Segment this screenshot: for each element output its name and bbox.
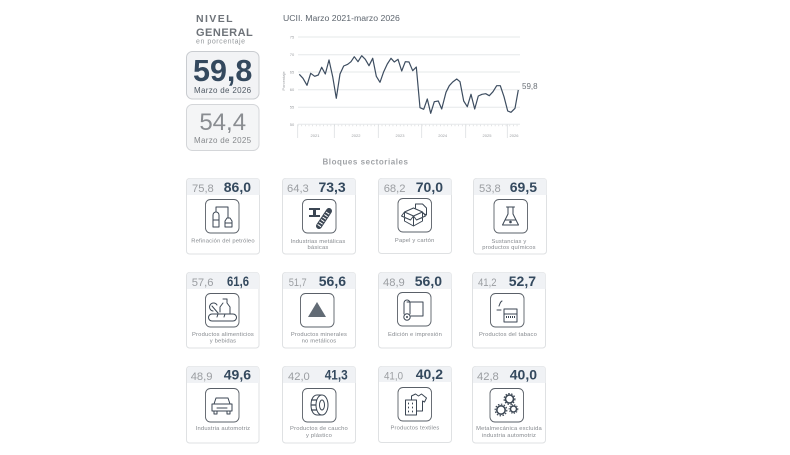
line chart: 2021	[311, 133, 320, 138]
icon: paper roll	[404, 300, 423, 320]
card: productos textiles	[378, 366, 452, 442]
card: edición e impresión: 56,0	[415, 273, 442, 289]
card: productos del tabaco: 52,7	[509, 273, 536, 289]
card: sustancias y productos químicos	[474, 178, 546, 254]
card: productos minerales no metálicos	[282, 272, 356, 348]
icon: garment and fabric	[406, 394, 426, 415]
line chart: 2026	[510, 133, 519, 138]
card: metalmecánica excluida industria automotriz: industria automotriz	[482, 433, 536, 439]
section heading: Bloques sectoriales	[322, 158, 409, 166]
card: refinación del petróleo: 75,8	[192, 183, 214, 195]
card: sustancias y productos químicos: Sustancias y	[491, 239, 527, 245]
card: productos del tabaco: 41,2	[478, 277, 496, 289]
card: productos de caucho y plástico: Productos de caucho	[290, 426, 348, 432]
icon: gears	[495, 394, 518, 416]
card: industrias metálicas básicas: 64,3	[287, 183, 309, 195]
card: sustancias y productos químicos: 53,8	[479, 183, 501, 195]
card: refinación del petróleo: 86,0	[224, 179, 251, 195]
line chart: 2024	[438, 133, 448, 138]
line chart: 60	[290, 87, 295, 92]
card: productos de caucho y plástico: 42,0	[288, 371, 310, 383]
card: industrias metálicas básicas: Industrias metálicas	[291, 239, 345, 245]
panel: current value	[186, 52, 259, 99]
line chart	[281, 34, 538, 138]
card: productos minerales no metálicos: Productos minerales	[291, 332, 347, 338]
card: papel y cartón: 68,2	[384, 183, 405, 195]
card: productos alimenticios y bebidas: Productos alimenticios	[192, 332, 254, 338]
card: industria automotriz: 48,9	[191, 371, 212, 383]
heading: nivel general: NIVEL	[196, 13, 234, 25]
line chart: 2025	[483, 133, 492, 138]
card: papel y cartón: Papel y cartón	[395, 238, 434, 244]
card: productos del tabaco	[472, 272, 546, 348]
line chart: 50	[290, 122, 295, 127]
line chart: 55	[290, 104, 295, 110]
card: refinación del petróleo	[186, 178, 260, 254]
icon: bottle and bread	[209, 299, 236, 321]
panel: previous value: Marzo de 2025	[194, 136, 252, 145]
heading: nivel general	[196, 13, 253, 46]
icon: mineral pile	[308, 302, 326, 317]
panel: current value: Marzo de 2026	[194, 86, 252, 95]
card: productos textiles: Productos textiles	[390, 426, 440, 432]
line chart: 2023	[396, 133, 405, 138]
icon: flask	[502, 207, 518, 225]
card: papel y cartón: 70,0	[416, 179, 443, 195]
icon: tyre	[311, 395, 328, 415]
card: papel y cartón	[378, 178, 452, 254]
line chart: 2022	[352, 133, 361, 138]
card: metalmecánica excluida industria automotriz: Metalmecánica excluida	[476, 426, 543, 432]
card: metalmecánica excluida industria automotriz: 40,0	[510, 366, 537, 382]
panel: previous value	[186, 104, 259, 150]
panel: current value: 59,8	[193, 54, 252, 88]
card: productos alimenticios y bebidas	[186, 272, 259, 348]
heading: nivel general: GENERAL	[196, 27, 253, 39]
icon: box	[402, 204, 426, 226]
line chart: 70	[290, 52, 295, 57]
icon: beam and coil	[309, 208, 329, 226]
card: sustancias y productos químicos: productos químicos	[482, 245, 536, 251]
card: productos alimenticios y bebidas: 61,6	[227, 273, 249, 289]
card: industria automotriz: 49,6	[224, 366, 251, 382]
icon: bottles	[213, 207, 232, 227]
card: productos textiles: 40,2	[416, 366, 443, 382]
card: industrias metálicas básicas: básicas	[308, 245, 328, 251]
card: productos alimenticios y bebidas: 57,6	[192, 277, 213, 289]
card: edición e impresión: Edición e impresión	[388, 332, 442, 338]
card: edición e impresión	[378, 272, 452, 348]
card: productos minerales no metálicos: 56,6	[319, 273, 346, 289]
card: industria automotriz	[186, 366, 259, 443]
card: productos textiles: 41,0	[384, 370, 403, 382]
card: productos minerales no metálicos: no metálicos	[302, 338, 336, 344]
card: productos de caucho y plástico: y plástico	[306, 433, 332, 439]
card: productos del tabaco: Productos del tabaco	[479, 332, 537, 338]
card: industrias metálicas básicas	[282, 178, 356, 254]
card: industrias metálicas básicas: 73,3	[318, 179, 346, 195]
card: metalmecánica excluida industria automotriz: 42,8	[477, 371, 499, 383]
card: edición e impresión: 48,9	[383, 277, 405, 289]
line chart: 75	[290, 34, 295, 40]
icon: tobacco pack	[497, 301, 517, 322]
card: productos de caucho y plástico: 41,3	[325, 366, 348, 382]
line chart: 65	[290, 70, 295, 74]
icon: car	[212, 398, 232, 414]
card: refinación del petróleo: Refinación del petróleo	[191, 238, 255, 244]
card: metalmecánica excluida industria automotriz	[472, 366, 546, 443]
end value label: 59,8	[522, 82, 538, 91]
card: sustancias y productos químicos: 69,5	[510, 179, 537, 195]
card: productos de caucho y plástico	[282, 366, 356, 443]
card: industria automotriz: Industria automotriz	[196, 426, 250, 432]
chart title: UCII. Marzo 2021-marzo 2026	[283, 13, 400, 23]
card: productos minerales no metálicos: 51,7	[289, 277, 307, 289]
heading: nivel general: en porcentaje	[196, 38, 246, 46]
card: productos alimenticios y bebidas: y bebidas	[210, 338, 236, 344]
line chart: Porcentaje	[281, 71, 286, 91]
data line	[299, 56, 518, 113]
panel: previous value: 54,4	[199, 109, 246, 136]
